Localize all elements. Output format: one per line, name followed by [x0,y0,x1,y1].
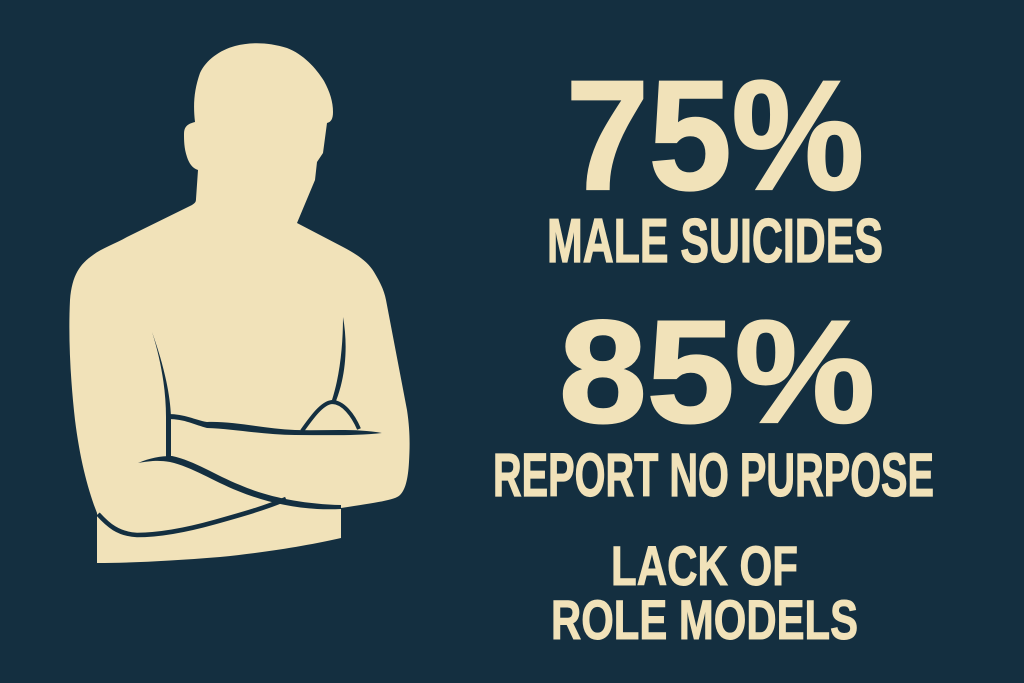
hand arc [302,402,359,431]
label male suicides: MALE SUICIDES [547,207,883,276]
forearm top line [168,414,382,435]
forearm lower line [138,456,341,509]
line lack of: LACK OF [611,534,798,597]
right upper arm line [332,317,346,401]
number 85%: 85% [559,290,875,453]
stat: 85% report no purpose [493,290,934,509]
icon: silhouette of man with crossed arms [69,43,410,563]
stat: 75% male suicides [547,49,883,276]
left upper arm line [152,332,171,457]
lower arm outline [98,499,286,535]
text: lack of role models [551,534,858,651]
number 75%: 75% [566,49,864,223]
line role models: ROLE MODELS [551,588,858,651]
silhouette body [69,43,410,563]
